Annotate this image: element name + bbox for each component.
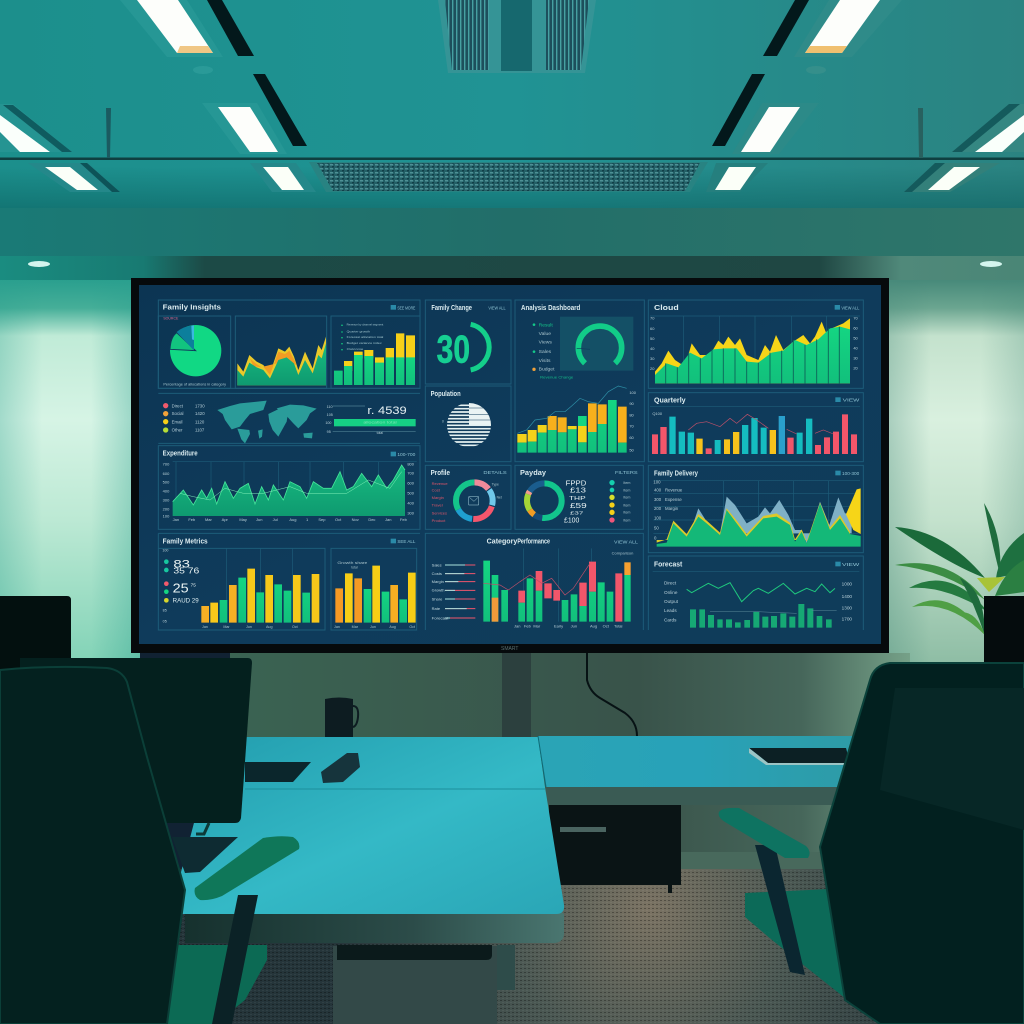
light fixture far right: [952, 104, 1024, 152]
armrest right: [719, 808, 810, 858]
left half panels: [158, 300, 517, 630]
panel: line chart: Jul: [273, 517, 278, 522]
panel: striped pie: 0: [442, 420, 444, 424]
bars chart two: Aug: [389, 625, 396, 629]
tag line chart: [391, 452, 416, 457]
combo bars: Aug: [590, 624, 597, 629]
range list: Share: [432, 596, 443, 601]
heading donut one: Profile: [431, 470, 450, 477]
stacked bars analysis: [517, 386, 637, 453]
bars chart two: Jan: [334, 625, 340, 629]
arc: [471, 324, 489, 370]
bars chart one: Jan: [202, 625, 208, 629]
left desk: [170, 736, 564, 943]
display screen: [139, 285, 881, 644]
stacked bars analysis: 80: [629, 413, 635, 418]
panel: line chart: Mar: [205, 517, 213, 522]
panel: line chart: Apr: [222, 517, 229, 522]
combo bars: Oct: [603, 624, 610, 629]
panel: line chart: 800: [407, 462, 415, 467]
analysis legend: Value: [539, 331, 551, 337]
analysis legend: Visits: [539, 358, 551, 364]
colored bar chart: [652, 411, 857, 454]
donut two legend: Item: [623, 503, 630, 507]
donut legend: Services: [432, 510, 447, 515]
ceiling rail: [0, 158, 1024, 160]
panel: cloud chart: 50: [853, 335, 859, 340]
heading: insights: Family Insights: [163, 305, 221, 312]
tag donut two: FILTERS: [615, 470, 638, 475]
plant: [895, 503, 1024, 666]
panel: bottom bars: [158, 533, 420, 630]
panel: line chart: Jan: [385, 517, 391, 522]
combo bars: Jun: [571, 624, 577, 629]
combo bars: Early: [554, 624, 563, 629]
speaker device: [321, 753, 360, 783]
world map: [217, 401, 317, 443]
total value: 110: [327, 405, 333, 409]
panel: donut one: Net: [497, 496, 502, 500]
kpi list: 25: [173, 582, 189, 596]
donut two legend: Item: [623, 511, 630, 515]
panel: line chart: 600: [407, 481, 415, 486]
heading layered: Family Delivery: [654, 470, 698, 477]
range list: Forecast: [432, 615, 449, 620]
heading line chart: Expenditure: [163, 451, 198, 458]
panel: line chart: Sep: [318, 517, 326, 522]
panel: line chart: Dec: [368, 517, 375, 522]
baseboard: [681, 852, 841, 869]
stacked bars: Budget variance index: [347, 341, 382, 345]
panel: cloud chart: 20: [650, 366, 655, 371]
panel: line and bars: Online: [664, 590, 678, 595]
panel: line chart: Feb: [188, 517, 196, 522]
light fixture top right: [763, 0, 902, 57]
heading bottom bars: Family Metrics: [163, 538, 208, 545]
panel: layered area: 200: [654, 506, 662, 511]
analysis legend: [532, 322, 574, 379]
bars chart one: Aug: [266, 625, 273, 629]
tag line chart: 100-700: [397, 452, 416, 457]
striped pie: [447, 403, 491, 445]
heading line and bars: Forecast: [654, 562, 683, 569]
panel: cloud chart: 50: [650, 336, 655, 341]
panel: line and bars: Leads: [664, 608, 677, 613]
tag bottom bars: SEE ALL: [397, 539, 416, 544]
pie chart: [163, 316, 226, 386]
tag cloud: [835, 305, 860, 310]
light fixture upper mid left: [202, 74, 307, 154]
tag multicolour: VIEW: [843, 398, 861, 403]
panel: layered area: [648, 465, 863, 553]
tag line and bars: VIEW: [842, 562, 861, 567]
panel: line chart: 1: [306, 517, 309, 522]
panel: layered area: 0: [654, 535, 657, 540]
wall display: [131, 278, 889, 653]
notebook: [749, 748, 850, 765]
combo bars: Total: [614, 624, 623, 629]
total value: allocation total: [363, 421, 397, 425]
panel: line chart: 700: [163, 462, 170, 467]
range list: Rate: [432, 606, 441, 611]
line trend: [687, 583, 835, 602]
panel: line chart: May: [239, 517, 247, 522]
stacked bars analysis: 90: [629, 401, 635, 406]
total value: r. 4539: [367, 405, 407, 417]
light fixture far left: [0, 104, 72, 152]
perforated grille: [309, 162, 708, 192]
bars chart two: Growth share: [337, 561, 367, 565]
donut chart one: [456, 482, 493, 519]
layered area chart: [657, 488, 861, 547]
donut two legend: Item: [623, 481, 630, 485]
panel: line and bars: Direct: [664, 581, 677, 586]
panel: line chart: Jun: [256, 517, 262, 522]
arm post right: [755, 845, 805, 975]
legend: Other: [172, 428, 183, 433]
combo bars: [483, 551, 633, 629]
range list: Costs: [432, 571, 442, 576]
kpi list: 100: [162, 549, 168, 553]
stacked bars analysis: 100: [629, 390, 637, 395]
light fixture lower mid left: [250, 163, 316, 192]
range list: Growth: [432, 588, 445, 593]
tag donut one: DETAILS: [483, 470, 507, 475]
panel: layered area: 100: [653, 479, 661, 484]
big number: 30: [437, 328, 470, 372]
ceiling speaker right: [806, 66, 826, 74]
donut values: [564, 481, 587, 524]
bars chart two: Jun: [370, 625, 376, 629]
panel: line and bars: 1400: [842, 594, 852, 599]
mini bars: [690, 604, 837, 628]
heading donut two: Payday: [520, 470, 546, 477]
analysis legend: Budget: [539, 367, 555, 373]
heading thirty: Family Change: [431, 305, 472, 312]
right desk: [538, 736, 860, 805]
pie chart: Percentage of allocations in category: [163, 381, 226, 386]
donut legend: Cost: [432, 488, 441, 493]
light fixture lower far left: [28, 163, 120, 192]
tag bottom middle: VIEW ALL: [614, 539, 638, 544]
pie chart: SOURCE: [163, 316, 179, 320]
bulkhead: [0, 208, 1024, 280]
analysis legend: Result: [539, 322, 553, 328]
kpi list: 05: [163, 619, 167, 623]
total value: [325, 405, 416, 435]
gauge chart: [560, 317, 633, 371]
panel: line chart: 300: [163, 497, 170, 502]
monitor pole: [502, 650, 531, 738]
combo bars: Mar: [533, 624, 541, 629]
panel: striped pie: [425, 386, 511, 462]
heading bottom middle continued: Performance: [517, 538, 550, 545]
panel: donut two: [515, 465, 643, 529]
donut legend: Product: [432, 518, 446, 523]
panel: line chart: 600: [163, 471, 170, 476]
donut values: £100: [564, 517, 579, 524]
tag thirty: VIEW ALL: [488, 305, 506, 310]
bars chart two: Mar: [352, 625, 359, 629]
wall left: [0, 280, 140, 680]
downlight right: [980, 261, 1002, 267]
tag layered: 100-300: [842, 471, 860, 476]
panel: donut one: Type: [492, 482, 499, 486]
panel: line chart: 400: [163, 488, 170, 493]
yellow green chart: [655, 318, 850, 383]
legend: Social: [172, 411, 183, 416]
panel: cloud chart: 40: [650, 346, 655, 351]
light fixture upper mid right: [712, 74, 819, 154]
panel: line chart: Oct: [335, 517, 342, 522]
analysis legend: Sales: [539, 349, 552, 355]
legend: 1120: [195, 419, 205, 424]
bars chart two: total: [351, 566, 358, 570]
legend: Email: [172, 419, 183, 424]
donut legend: Revenue: [432, 481, 448, 486]
donut legend: Travel: [432, 503, 443, 508]
total value: total: [377, 431, 383, 435]
panel: cloud chart: [648, 300, 863, 388]
panel: cloud chart: 30: [650, 356, 655, 361]
ceiling speaker left: [193, 66, 213, 74]
panel: layered area: 100: [654, 515, 662, 520]
panel: line chart: 400: [407, 501, 415, 506]
panel: cloud chart: 30: [853, 355, 859, 360]
panel: line and bars: Cards: [664, 617, 677, 622]
bars chart two: [334, 561, 416, 629]
panel: gauge thirty: [425, 300, 511, 384]
far left monitor: [0, 596, 71, 670]
donut values: FPPD: [566, 481, 586, 488]
legend: 1730: [195, 403, 205, 408]
combo bars: Jan: [514, 624, 520, 629]
top vent: [438, 0, 596, 73]
tag line and bars: [835, 562, 861, 567]
panel: line chart: [158, 446, 420, 529]
range list: [432, 562, 475, 620]
stacked bars: Outcome: [347, 347, 364, 351]
area chart: [237, 337, 326, 385]
panel: layered area: 50: [654, 525, 659, 530]
ceiling: [0, 0, 1024, 208]
right chair: [719, 663, 1024, 1024]
panel: insights: [158, 300, 420, 388]
panel: line chart: Feb: [400, 517, 408, 522]
total value: 105: [327, 413, 333, 417]
light fixture lower mid right: [706, 163, 768, 192]
donut two legend: Item: [623, 488, 630, 492]
range list: Margin: [432, 579, 444, 584]
panel: cloud chart: 70: [853, 315, 859, 320]
stacked bars: Revenue by channel segment: [347, 323, 383, 327]
wall right: [880, 280, 1024, 680]
panel: line and bars: 1000: [842, 581, 852, 586]
heading multicolour: Quarterly: [654, 398, 686, 405]
donut two legend: Item: [623, 496, 630, 500]
left chair: [0, 667, 299, 1024]
kpi list: 35 76: [173, 566, 200, 575]
panel: layered area: Expense: [665, 497, 682, 502]
donut legend: [432, 481, 448, 523]
display bezel: [131, 278, 889, 653]
range list: Sales: [432, 562, 442, 567]
chair back left: [0, 667, 185, 1024]
chair seat left: [165, 945, 267, 1024]
bars chart one: Oct: [292, 625, 298, 629]
stacked bars analysis: 70: [629, 424, 635, 429]
light fixture lower far right: [904, 163, 1000, 192]
bars chart two: Oct: [409, 625, 415, 629]
heading bottom middle: Category: [487, 538, 517, 545]
stacked bars analysis: 50: [629, 447, 635, 452]
chair mesh: [880, 688, 1024, 830]
panel: layered area: 400: [654, 488, 662, 493]
kpi list: 75: [191, 583, 196, 588]
tag insights: SEE MORE: [397, 305, 415, 310]
panel: layered area: 300: [654, 497, 662, 502]
total value: 100: [325, 421, 331, 425]
cabinet: [549, 805, 681, 893]
rail hanger left: [106, 108, 111, 158]
stacked bars analysis: 60: [629, 435, 635, 440]
chair back right: [820, 663, 1024, 1024]
panel: line chart: Jan: [173, 517, 179, 522]
stacked bars: [334, 323, 415, 385]
kpi list: 83: [173, 559, 190, 571]
stacked bars: Quarter growth: [347, 329, 370, 333]
legend: 1420: [195, 411, 205, 416]
panel: cloud chart: 60: [853, 325, 859, 330]
kpi list: 85: [163, 609, 167, 613]
tag insights: [391, 305, 415, 310]
donut two legend: Item: [623, 518, 630, 522]
combo bars: Comparison: [612, 551, 633, 556]
armrest left: [195, 836, 299, 900]
panel: bottom middle start: [425, 533, 517, 630]
panel: line chart: Aug: [289, 517, 296, 522]
display brand: SMART: [501, 646, 518, 652]
panel: line and bars: [648, 556, 863, 630]
heading analysis: Analysis Dashboard: [521, 305, 580, 312]
analysis legend: Views: [539, 340, 552, 346]
panel: multicolour bars: [648, 393, 863, 462]
rail hanger right: [918, 108, 923, 158]
panel: line chart: 700: [407, 471, 415, 476]
tag multicolour: [835, 397, 861, 403]
area line graph: [173, 465, 405, 516]
map row: [158, 393, 420, 443]
panel: line and bars: Output: [664, 599, 679, 604]
combo bars: Feb: [524, 624, 532, 629]
laptop: [245, 762, 311, 782]
panel: line chart: 300: [407, 511, 415, 516]
plant pot: [984, 596, 1024, 666]
donut values: £13: [570, 487, 586, 494]
panel: cloud chart: 70: [650, 315, 655, 320]
kpi list: [162, 549, 200, 623]
panel: line chart: 200: [163, 506, 170, 511]
chair seat right: [745, 889, 850, 1002]
heading cloud: Cloud: [654, 305, 679, 312]
donut chart two: [527, 483, 562, 518]
heading striped pie: Population: [431, 391, 461, 398]
arm post left: [212, 895, 258, 1024]
bars chart one: [201, 569, 319, 629]
analysis legend: Revenue Change: [540, 374, 574, 379]
mug: [325, 698, 358, 737]
right half panels: [480, 300, 863, 630]
panel: layered area: Revenue: [665, 488, 683, 493]
kpi list: RAUD 29: [173, 598, 199, 605]
panel: cloud chart: 20: [853, 365, 859, 370]
panel: layered area: Margin: [665, 506, 679, 511]
panel: bottom middle bars: [480, 533, 643, 630]
donut values: £37: [570, 511, 584, 517]
downlight left: [28, 261, 50, 267]
bars chart one: Mar: [223, 625, 230, 629]
desk leg box: [333, 945, 515, 1024]
panel: line chart: 500: [163, 480, 170, 485]
donut centre icon: [469, 497, 479, 505]
cable: [587, 653, 637, 736]
panel: line chart: Nov: [352, 517, 359, 522]
total value: 95: [327, 430, 331, 434]
panel: line and bars: 1700: [842, 617, 852, 622]
legend: 1107: [195, 428, 205, 433]
donut two legend: [609, 480, 630, 523]
stacked bars: Forecast allocation total: [347, 335, 384, 339]
panel: line and bars: 1300: [842, 606, 852, 611]
panel: line chart: 100: [163, 514, 170, 519]
legend: Direct: [172, 403, 184, 408]
panel: donut one: [425, 465, 511, 529]
tag layered: [835, 471, 860, 476]
keyboard: [172, 837, 238, 873]
panel: analysis: [515, 300, 644, 462]
panel: line chart: 500: [407, 491, 415, 496]
lower wall: [230, 653, 910, 873]
desk monitor back: [20, 658, 252, 834]
legend: [163, 403, 205, 433]
carpet floor: [0, 868, 1024, 1024]
tag bottom bars: [391, 539, 416, 544]
colored bar chart: Q100: [652, 411, 663, 416]
donut values: THP: [569, 496, 586, 502]
panel: cloud chart: 40: [853, 345, 859, 350]
light fixture top left: [120, 0, 254, 57]
donut values: £59: [570, 503, 587, 510]
donut legend: Margin: [432, 495, 444, 500]
bars chart one: Jun: [246, 625, 252, 629]
panel: cloud chart: 60: [650, 326, 655, 331]
tag cloud: VIEW ALL: [841, 305, 860, 310]
